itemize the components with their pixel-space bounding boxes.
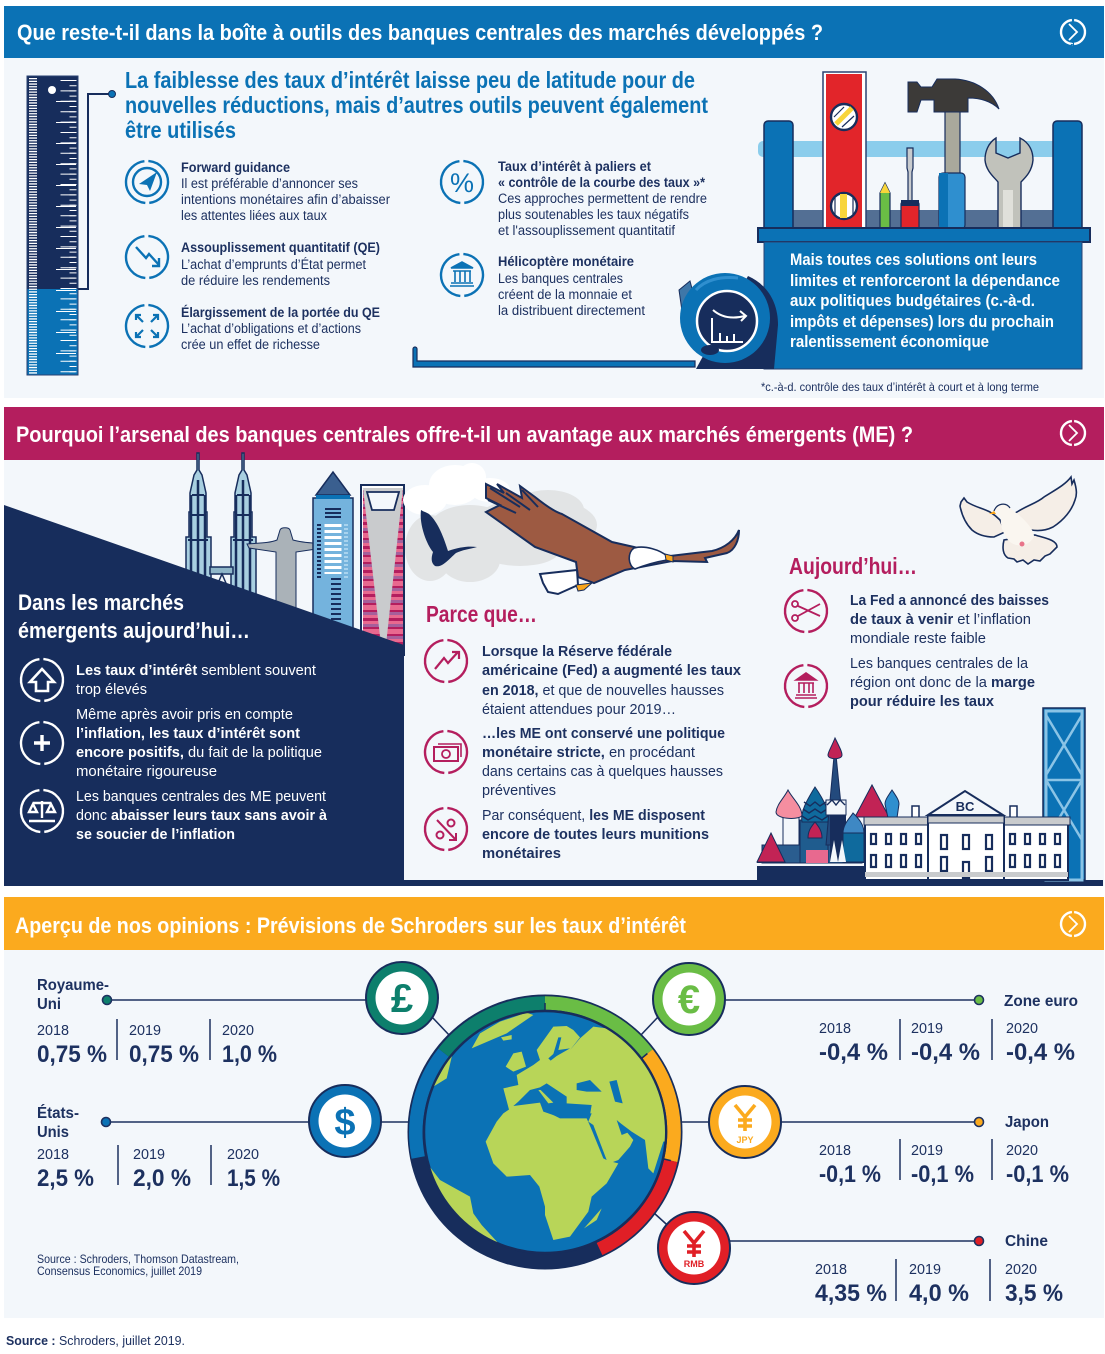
text: quantitative easing: L’achat d’emprunts d’État permet	[181, 257, 366, 272]
text: Fed hikes	[482, 643, 742, 718]
heading: section 1: La faiblesse des taux d’intérêt laisse peu de latitude pour de	[125, 67, 695, 93]
illustration: Christ statue	[247, 528, 325, 630]
text: yield curve control: et l'assouplissement quantitatif	[498, 223, 675, 238]
text: EM ammunition: Par conséquent, les ME disposent	[482, 807, 705, 824]
tool: wrench	[985, 138, 1033, 229]
forecast: Japan	[819, 1114, 1069, 1188]
text: helicopter money: la distribuent directement	[498, 303, 645, 318]
connector lines	[102, 996, 984, 1246]
forecast: China: 3,5 %	[1005, 1280, 1063, 1307]
text: yield curve control: « contrôle de la courbe des taux »*	[498, 175, 706, 190]
text: room to cut: pour réduire les taux	[850, 693, 995, 710]
illustration: dark navy polygon	[4, 505, 404, 886]
callout text in toolbox: limites et renforceront la dépendance	[790, 272, 1060, 290]
heading: section 1: nouvelles réductions, mais d’autres outils peuvent également	[125, 92, 708, 118]
forecast: United States: 2,0 %	[133, 1165, 191, 1192]
text: yield curve control: plus soutenables les taux négatifs	[498, 207, 689, 222]
forecast: United States: 2020	[227, 1147, 259, 1163]
panel: toolbox section	[4, 6, 1104, 398]
icon: plus	[19, 720, 65, 766]
illustration: small dark eagle	[421, 510, 477, 566]
text: helicopter money: créent de la monnaie et	[498, 287, 632, 302]
text: tight monetary policy: …les ME ont conservé une politique	[482, 725, 725, 742]
globe	[408, 994, 682, 1270]
tool: screwdriver	[901, 148, 919, 229]
text: quantitative easing	[181, 240, 380, 288]
text: helicopter money: Hélicoptère monétaire	[498, 254, 634, 269]
badge: renminbi: RMB	[684, 1259, 705, 1269]
source note inside panel	[37, 1252, 239, 1278]
illustration: twin towers	[186, 453, 256, 600]
forecast: Japan: 2019	[911, 1143, 943, 1159]
text: QE broadening: L’achat d’obligations et d’actions	[181, 321, 361, 336]
text: EM ammunition: monétaires	[482, 845, 561, 862]
icon: bank	[439, 252, 485, 298]
text: tight monetary policy: préventives	[482, 782, 556, 799]
text: Fed cuts	[850, 592, 1049, 647]
text: rates too high: Les taux d’intérêt semblent souvent	[76, 663, 316, 679]
callout text in toolbox: Mais toutes ces solutions ont leurs	[790, 251, 1037, 269]
illustration: central bank building	[864, 791, 1070, 880]
forecast: Japan: Japon	[1005, 1114, 1049, 1131]
forecast: China	[815, 1233, 1063, 1307]
section header: emerging markets	[4, 407, 1104, 460]
connector from ruler to heading	[78, 90, 116, 289]
heading: emerging markets today	[18, 590, 250, 643]
forecast: Eurozone	[819, 993, 1078, 1066]
text: forward guidance: les attentes liées aux taux	[181, 208, 327, 223]
section header: forecasts: Aperçu de nos opinions : Prévisions de Schroders sur les taux d’intérêt	[15, 913, 687, 938]
forecast: Eurozone: -0,4 %	[819, 1039, 888, 1066]
forecast: United Kingdom	[37, 977, 277, 1068]
forecast: United Kingdom: 2019	[129, 1023, 161, 1039]
heading: emerging markets today: émergents aujourd’hui…	[18, 618, 250, 643]
text: room to cut: Les banques centrales de la	[850, 655, 1029, 672]
text: tight monetary policy: dans certains cas à quelques hausses	[482, 763, 723, 780]
icon: balance scale	[19, 788, 65, 834]
forecast: Japan: 2020	[1006, 1143, 1038, 1159]
text: Fed cuts: de taux à venir et l’inflation	[850, 611, 1031, 628]
source note inside panel: Consensus Economics, juillet 2019	[37, 1264, 202, 1278]
icon: banknote	[423, 729, 469, 775]
forecast: China: 4,0 %	[909, 1280, 969, 1307]
icon: scissors	[783, 588, 829, 634]
text: Fed hikes: en 2018, et que de nouvelles hausses	[482, 682, 724, 699]
forecast: Eurozone: -0,4 %	[911, 1039, 980, 1066]
badge: euro: €	[678, 978, 700, 1022]
forecast: United Kingdom: 1,0 %	[222, 1041, 277, 1068]
illustration: toolbox and tools	[758, 72, 1090, 369]
text: quantitative easing: de réduire les rendements	[181, 273, 330, 288]
tool: pencil	[880, 183, 890, 228]
forecast: Eurozone: 2018	[819, 1021, 851, 1037]
forecast: United States	[37, 1103, 280, 1192]
forecast: United Kingdom: 0,75 %	[129, 1041, 199, 1068]
text: forward guidance	[181, 160, 390, 223]
text: forward guidance: Forward guidance	[181, 160, 290, 175]
forecast: Eurozone: Zone euro	[1004, 993, 1078, 1010]
illustration: dove	[960, 477, 1076, 564]
icon: compass	[124, 159, 170, 205]
text: lower rates: donc abaisser leurs taux sans avoir à	[76, 808, 328, 824]
forecast: China: 2020	[1005, 1262, 1037, 1278]
globe land masses	[423, 1013, 673, 1245]
panel: emerging markets section	[4, 407, 1104, 886]
badge: dollar: $	[334, 1102, 356, 1144]
text: forward guidance: Il est préférable d’annoncer ses	[181, 176, 358, 191]
forecast: United Kingdom: Royaume-	[37, 977, 109, 994]
text: positive real rates: Même après avoir pris en compte	[76, 707, 293, 723]
text: Fed cuts: La Fed a annoncé des baisses	[850, 592, 1049, 609]
badge: dollar	[309, 1085, 381, 1157]
forecast: Eurozone: -0,4 %	[1006, 1039, 1075, 1066]
text: room to cut	[850, 655, 1035, 710]
callout text in toolbox	[790, 251, 1060, 351]
heading: section 1	[125, 67, 708, 143]
icon: percent: %	[450, 168, 474, 198]
section header: emerging markets: Pourquoi l’arsenal des banques centrales offre-t-il un avantage aux marchés émergents (ME) ?	[16, 422, 913, 447]
heading: section 1: être utilisés	[125, 117, 236, 143]
forecast: United Kingdom: Uni	[37, 996, 61, 1013]
text: quantitative easing: Assouplissement quantitatif (QE)	[181, 240, 380, 255]
text: positive real rates	[76, 707, 322, 780]
forecast: United States: 2018	[37, 1147, 69, 1163]
text: yield curve control: Taux d’intérêt à paliers et	[498, 159, 651, 174]
source note inside panel: Source : Schroders, Thomson Datastream,	[37, 1252, 239, 1266]
heading: because: Parce que…	[426, 601, 537, 627]
tool: hammer	[908, 79, 999, 229]
text: lower rates: Les banques centrales des ME peuvent	[76, 789, 326, 805]
globe ring segments	[416, 1003, 674, 1249]
illustration: Saint Basil's cathedral	[757, 738, 899, 880]
forecast: United Kingdom: 2018	[37, 1023, 69, 1039]
text: helicopter money: Les banques centrales	[498, 271, 623, 286]
text: Fed hikes: Lorsque la Réserve fédérale	[482, 643, 672, 660]
forecast: Japan: -0,1 %	[911, 1161, 974, 1188]
badge: euro	[653, 963, 725, 1035]
forecast: United States: 1,5 %	[227, 1165, 280, 1192]
callout text in toolbox: impôts et dépenses) lors du prochain	[790, 313, 1054, 331]
badge: pound: £	[391, 977, 413, 1021]
icon: rising chart	[423, 638, 469, 684]
text: positive real rates: l’inflation, les taux d’intérêt sont	[76, 726, 300, 742]
text: positive real rates: encore positifs, du fait de la politique	[76, 745, 322, 761]
footnote: *c.-à-d. contrôle des taux d’intérêt à court et à long terme	[761, 380, 1039, 394]
section header: tools	[4, 6, 1104, 58]
forecast: United States: Unis	[37, 1124, 69, 1141]
forecast: Japan: -0,1 %	[1006, 1161, 1069, 1188]
badge: pound	[366, 962, 438, 1034]
illustration: blue skyscraper	[313, 472, 353, 648]
icon: percent	[439, 159, 485, 205]
text: lower rates	[76, 789, 328, 843]
text: room to cut: région ont donc de la marge	[850, 674, 1035, 691]
icon: falling chart	[124, 234, 170, 280]
text: Fed hikes: étaient attendues pour 2019…	[482, 701, 676, 718]
text: EM ammunition	[482, 807, 709, 862]
text: QE broadening: crée un effet de richesse	[181, 337, 320, 352]
ruler illustration	[27, 76, 78, 375]
illustration: clouds	[403, 463, 597, 582]
illustration: bald eagle	[486, 484, 739, 594]
text: rates too high: trop élevés	[76, 682, 147, 698]
text: EM ammunition: encore de toutes leurs munitions	[482, 826, 709, 843]
text: tight monetary policy: monétaire stricte, en procédant	[482, 744, 696, 761]
forecast: Eurozone: 2019	[911, 1021, 943, 1037]
forecast: Japan: 2018	[819, 1143, 851, 1159]
forecast: China: Chine	[1005, 1233, 1048, 1250]
section header: forecasts	[4, 897, 1104, 950]
forecast: China: 2019	[909, 1262, 941, 1278]
callout text in toolbox: aux politiques budgétaires (c.-à-d.	[790, 292, 1035, 310]
forecast: China: 2018	[815, 1262, 847, 1278]
text: rates too high	[76, 663, 316, 698]
text: Fed cuts: mondiale reste faible	[850, 630, 986, 647]
badge: yen: JPY	[736, 1135, 754, 1145]
illustration: Shanghai tower	[361, 485, 404, 655]
section header: tools: Que reste-t-il dans la boîte à outils des banques centrales des marchés développés ?	[17, 20, 823, 45]
text: yield curve control: Ces approches permettent de rendre	[498, 191, 707, 206]
text: QE broadening	[181, 305, 380, 352]
text: yield curve control	[498, 159, 707, 238]
icon: percent down	[423, 806, 469, 852]
page source: Source : Schroders, juillet 2019.	[6, 1334, 185, 1348]
text: positive real rates: monétaire rigoureuse	[76, 764, 217, 780]
forecast: Japan: -0,1 %	[819, 1161, 881, 1188]
forecast: Eurozone: 2020	[1006, 1021, 1038, 1037]
text: helicopter money	[498, 254, 645, 318]
forecast: United States: 2019	[133, 1147, 165, 1163]
tool: spirit level	[823, 72, 866, 229]
badge: yen	[709, 1086, 781, 1158]
icon: bank crimson	[783, 663, 829, 709]
forecast: United Kingdom: 0,75 %	[37, 1041, 107, 1068]
icon: expanding arrows	[124, 303, 170, 349]
forecast: United Kingdom: 2020	[222, 1023, 254, 1039]
text: forward guidance: intentions monétaires afin d’abaisser	[181, 192, 390, 207]
text: tight monetary policy	[482, 725, 725, 799]
text: Fed hikes: américaine (Fed) a augmenté les taux	[482, 662, 742, 679]
forecast: China: 4,35 %	[815, 1280, 887, 1307]
callout text in toolbox: ralentissement économique	[790, 333, 989, 351]
icon: up arrow	[19, 657, 65, 703]
illustration: tape measure	[413, 273, 778, 369]
heading: today: Aujourd’hui…	[789, 553, 917, 579]
text: QE broadening: Élargissement de la portée du QE	[181, 305, 380, 320]
panel: forecasts section	[4, 897, 1104, 1318]
illustration: central bank building: BC	[956, 799, 975, 814]
illustration: blue lattice tower	[1043, 708, 1085, 880]
text: lower rates: se soucier de l’inflation	[76, 827, 235, 843]
badge: renminbi	[658, 1212, 730, 1284]
heading: emerging markets today: Dans les marchés	[18, 590, 184, 615]
forecast: United States: États-	[37, 1103, 79, 1122]
forecast: United States: 2,5 %	[37, 1165, 94, 1192]
